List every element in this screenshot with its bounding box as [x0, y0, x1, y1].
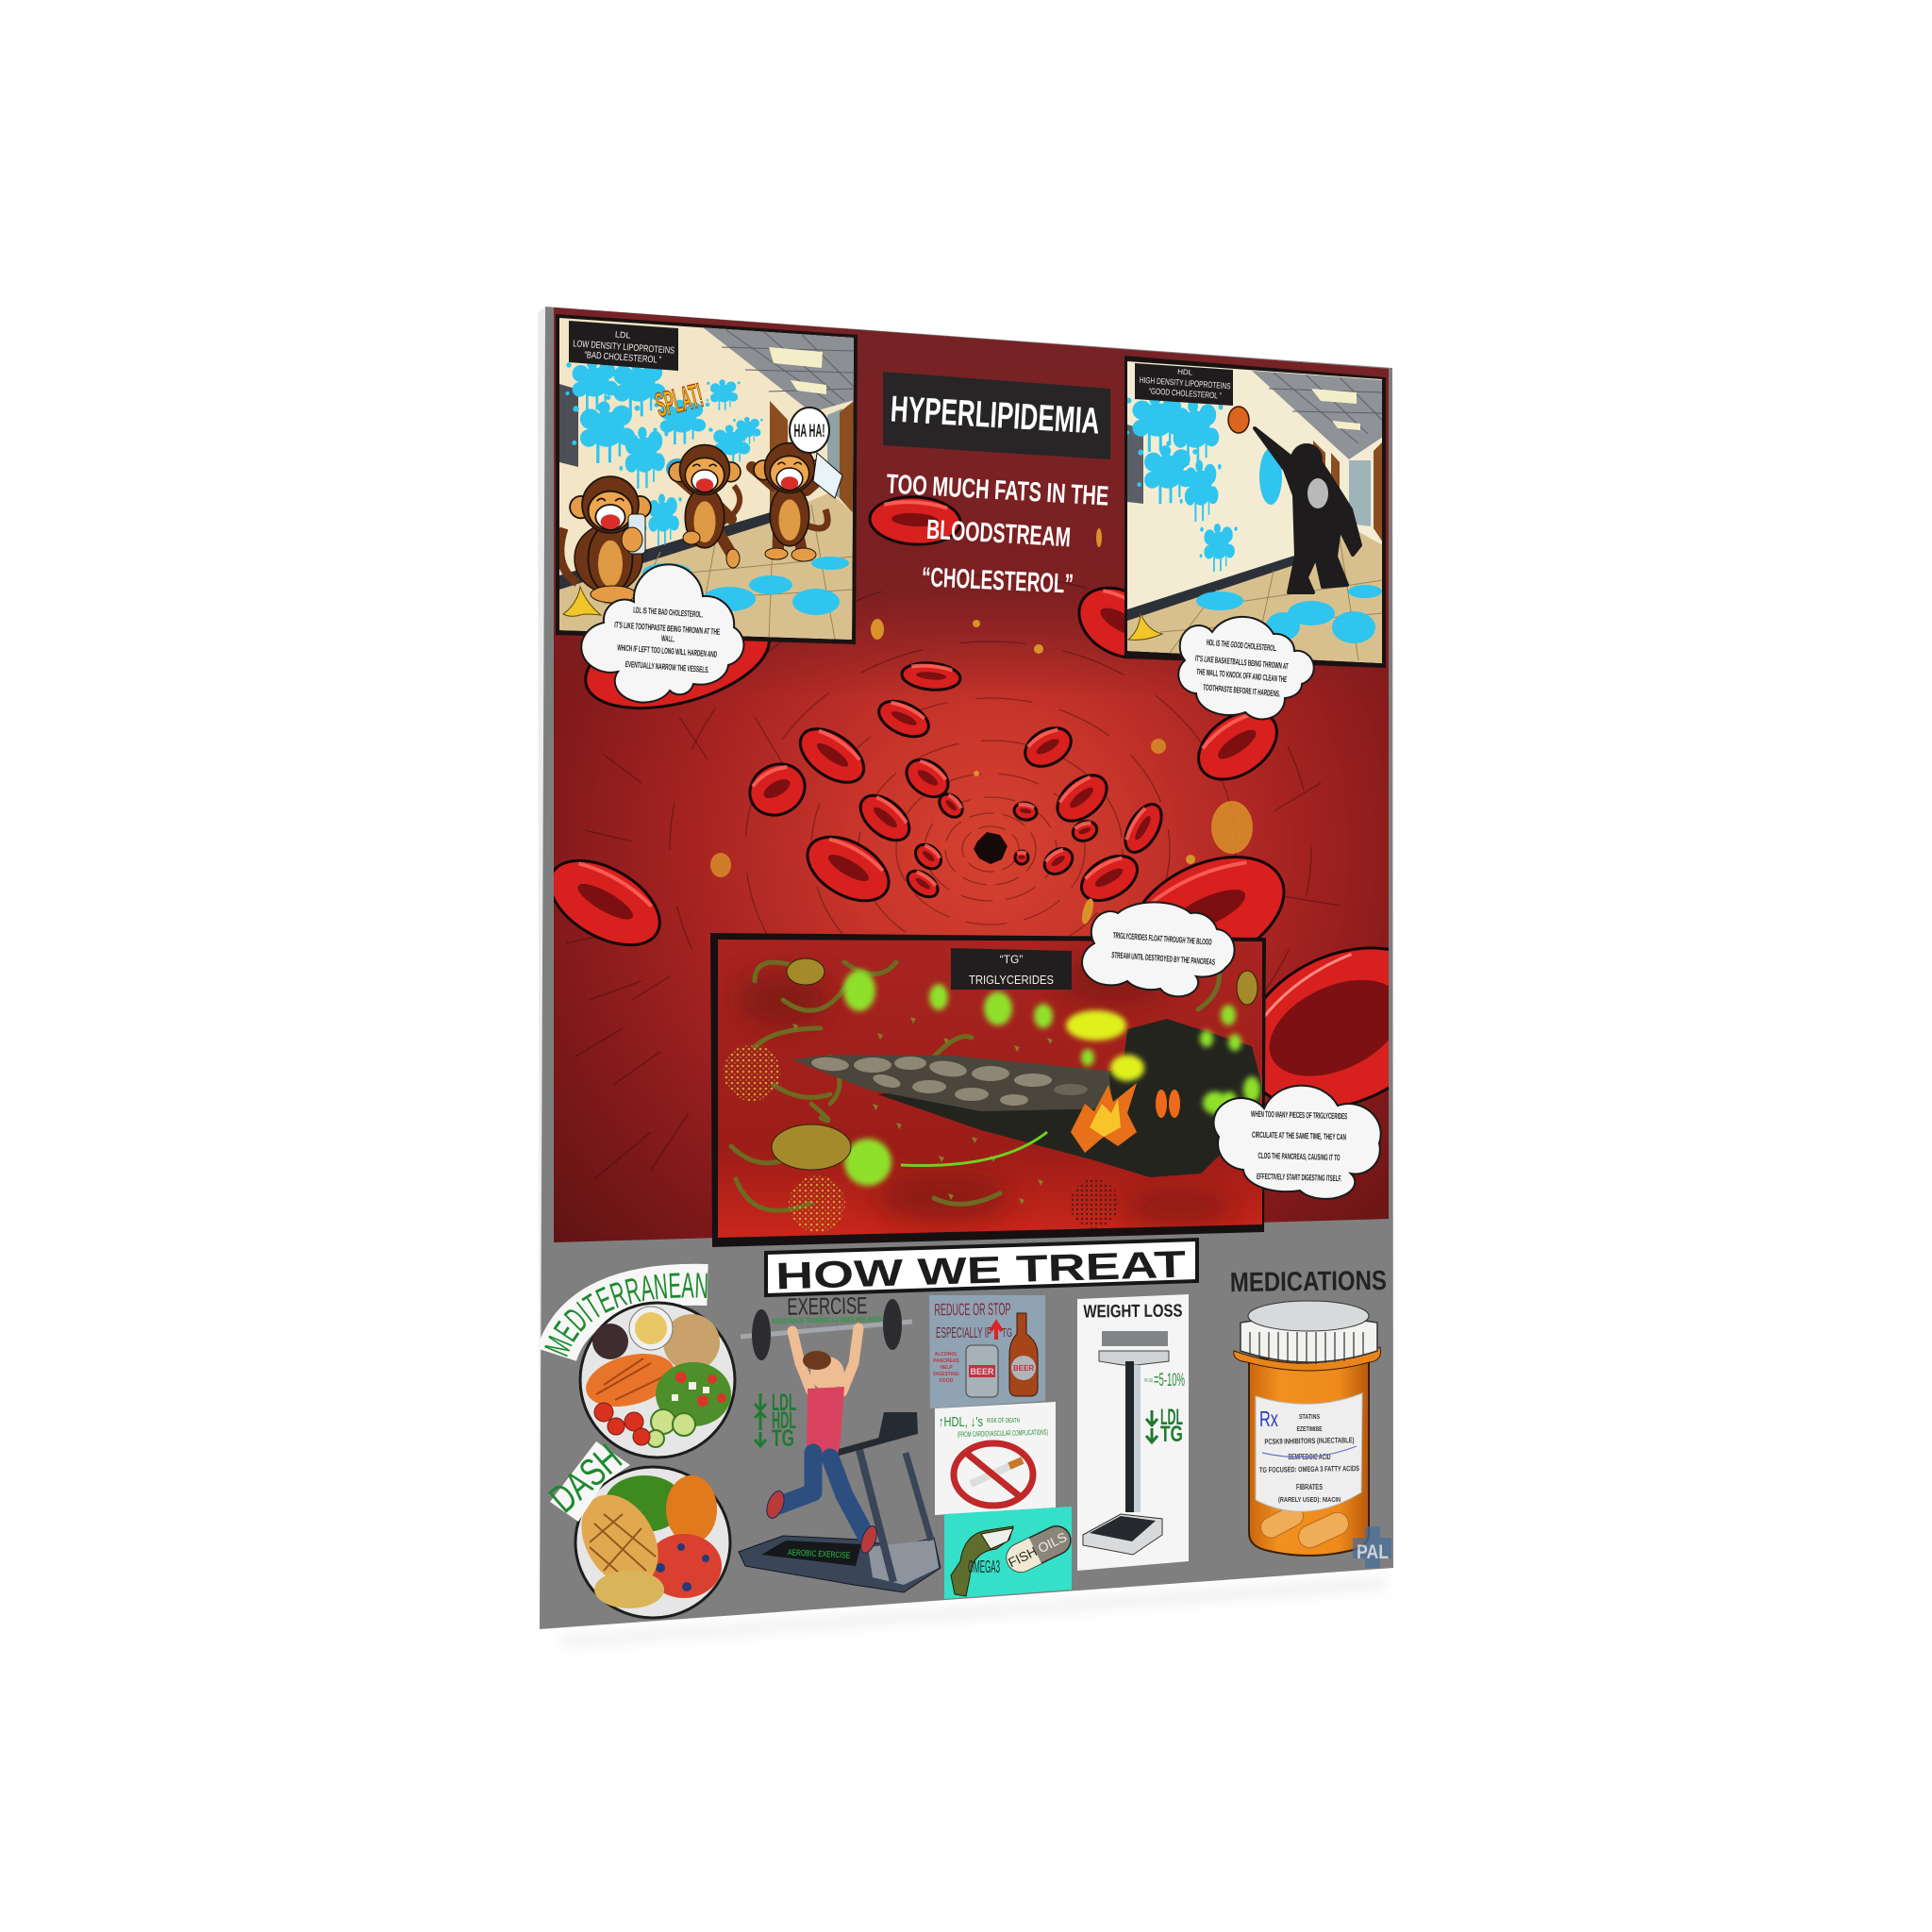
logo: PAL: PAL — [1357, 1541, 1389, 1563]
prescription label: FIBRATES — [1296, 1483, 1323, 1491]
icon: fish — [951, 1526, 1013, 1596]
parasite tentacles — [731, 962, 1219, 1210]
LDL label — [569, 321, 678, 371]
TG label — [951, 948, 1072, 990]
green energy orbs — [843, 970, 1260, 1186]
LDL hallway and doors — [559, 384, 854, 514]
callout: pancreas warning: WHEN TOO MANY PIECES OF TRIGLYCERIDES — [1251, 1109, 1347, 1121]
callout: LDL explanation: WALL. — [661, 634, 675, 643]
HDL floor — [1127, 526, 1383, 664]
fat globules — [710, 528, 1253, 925]
panel: alcohol: ESPECIALLY IF — [936, 1325, 991, 1341]
panel: weight loss: WEIGHT LOSS — [1083, 1302, 1183, 1322]
prescription label — [1256, 1393, 1362, 1511]
panel: alcohol — [929, 1295, 1045, 1408]
prescription label: (RARELY USED): NIACIN — [1278, 1497, 1341, 1504]
panel: stop smoking — [935, 1402, 1056, 1515]
HDL label: “GOOD CHOLESTEROL ” — [1148, 386, 1222, 401]
giant red blood cell — [1264, 946, 1389, 1105]
subtitle: TOO MUCH FATS IN THE — [886, 469, 1109, 512]
subtitle: “CHOLESTEROL” — [921, 562, 1074, 600]
callout: LDL explanation: EVENTUALLY NARROW THE VESSELS. — [625, 659, 709, 675]
panel: omega 3 — [944, 1507, 1075, 1599]
panel: weight loss: WT LOSS — [1144, 1378, 1153, 1384]
callout: HDL explanation — [1178, 617, 1314, 719]
callout: triglycerides float: TRIGLYCERIDES FLOAT THROUGH THE BLOOD — [1112, 930, 1212, 947]
icon: fish oil capsule: OILS — [1036, 1529, 1069, 1556]
icon: fish oil capsule: FISH — [1006, 1543, 1040, 1571]
bottle flange — [1234, 1347, 1381, 1371]
dark hole at vessel center — [974, 832, 1008, 864]
callout: LDL explanation: LDL IS THE BAD CHOLESTEROL. — [633, 605, 703, 620]
panel: HDL gorilla comic — [1123, 356, 1387, 670]
exercise effects: TG — [772, 1425, 794, 1452]
right monkey — [752, 443, 842, 561]
DASH label: DASH — [541, 1436, 630, 1521]
pills — [1257, 1502, 1352, 1552]
callout: triglycerides float: STREAM UNTIL DESTROYED BY THE PANCREAS — [1111, 950, 1215, 967]
panel: alcohol: TG — [1002, 1325, 1012, 1340]
LDL label: LOW DENSITY LIPOPROTEINS — [573, 339, 675, 357]
treadmill — [739, 1412, 941, 1592]
treadmill: AEROBIC EXERCISE — [788, 1547, 850, 1560]
panel: weight loss: =5-10% — [1154, 1371, 1185, 1391]
Mediterranean label text: MEDITERRANEAN — [544, 1273, 708, 1357]
panel: alcohol: FOOD — [940, 1378, 954, 1384]
HDL wall — [1123, 358, 1387, 670]
LDL label: LDL — [615, 329, 631, 341]
panel: triglycerides comic — [710, 933, 1269, 1247]
panel: alcohol: REDUCE OR STOP — [934, 1300, 1011, 1319]
logo: PAL — [1353, 1526, 1391, 1568]
panel: weight loss: LDL — [1160, 1405, 1183, 1430]
woman exercising — [763, 1328, 880, 1555]
callout: LDL explanation: WHICH IF LEFT TOO LONG WILL HARDEN AND — [617, 642, 718, 659]
red blood cells — [536, 495, 1302, 991]
flames — [1071, 1083, 1180, 1153]
panel: stop smoking: RISK OF DEATH — [987, 1418, 1020, 1424]
HDL hallway and doors — [1127, 425, 1383, 542]
TG label: “TG” — [1000, 953, 1023, 966]
TG label: TRIGLYCERIDES — [969, 973, 1054, 987]
debris — [792, 1017, 1053, 1205]
prescription label: STATINS — [1299, 1414, 1320, 1421]
heading: how we treat: HOW WE TREAT — [775, 1244, 1187, 1297]
speckle clusters — [724, 1044, 1119, 1232]
HDL label: HDL — [1177, 367, 1193, 377]
prescription label: EZETIMIBE — [1296, 1426, 1323, 1433]
DASH label — [541, 1436, 630, 1522]
panel: weight loss: TG — [1160, 1422, 1183, 1447]
exercise effects — [755, 1390, 796, 1452]
title block: HYPERLIPIDEMIA — [890, 389, 1101, 442]
icon: beer bottle: BEER — [1013, 1364, 1034, 1373]
panel: weight loss — [1077, 1294, 1189, 1571]
HDL label — [1135, 363, 1233, 406]
LDL floor — [559, 492, 855, 641]
panel: LDL monkeys comic: SPLAT! — [652, 375, 707, 425]
heading: how we treat — [766, 1240, 1197, 1297]
callout: pancreas warning — [1214, 1086, 1381, 1199]
ribbed cap — [1241, 1317, 1377, 1362]
subtitle: BLOODSTREAM — [925, 515, 1072, 553]
icon: fish oil capsule — [1002, 1522, 1075, 1576]
icon: beer can: BEER — [970, 1367, 994, 1376]
icon: no smoking — [954, 1443, 1033, 1506]
callout: HDL explanation: IT'S LIKE BASKETBALLS BEING THROWN AT — [1195, 654, 1289, 671]
TG background — [712, 934, 1269, 1245]
HDL ceiling — [1252, 371, 1383, 459]
subtitle — [886, 469, 1109, 600]
callout: pancreas warning: CIRCULATE AT THE SAME TIME, THEY CAN — [1252, 1130, 1346, 1141]
panel: LDL monkeys comic — [556, 314, 858, 644]
poster side edge — [538, 307, 545, 1629]
basketball — [1228, 407, 1249, 433]
HDL label: HIGH DENSITY LIPOPROTEINS — [1139, 375, 1231, 391]
panel: omega 3: OMEGA3 — [968, 1557, 1000, 1576]
prescription label: PCSK9 INHIBITORS (INJECTABLE) — [1264, 1436, 1355, 1446]
panel: stop smoking: ↑HDL, ↓'s — [939, 1414, 983, 1430]
speech bubble: HA HA: HA HA! — [794, 422, 824, 441]
HDL banana peel — [1128, 613, 1162, 640]
callout: HDL explanation: TOOTHPASTE BEFORE IT HARDENS. — [1203, 682, 1281, 699]
parasite creatures — [772, 958, 1257, 1170]
toothpaste splats — [565, 358, 849, 615]
exercise effects: HDL — [772, 1407, 796, 1434]
callout: LDL explanation: IT'S LIKE TOOTHPASTE BEING THROWN AT THE — [614, 620, 720, 637]
Mediterranean banner — [557, 1285, 708, 1355]
gorilla — [1255, 428, 1360, 592]
warship hull — [791, 1019, 1263, 1177]
HDL toothpaste splats — [1124, 393, 1382, 643]
LDL label: “BAD CHOLESTEROL ” — [584, 350, 661, 366]
callout: pancreas warning: CLOG THE PANCREAS, CAUSING IT TO — [1257, 1151, 1341, 1162]
callout: pancreas warning: EFFECTIVELY START DIGESTING ITSELF. — [1257, 1172, 1341, 1183]
prescription label: Rx — [1259, 1407, 1278, 1431]
exercise heading: EXERCISE — [787, 1292, 868, 1321]
panel: blood vessel background — [554, 308, 1389, 1242]
callout: HDL explanation: HDL IS THE GOOD CHOLESTEROL. — [1206, 638, 1277, 653]
icon: doctor scale — [1083, 1331, 1169, 1555]
prescription label: BEMPEDOIC ACID — [1289, 1453, 1331, 1461]
green beam — [901, 1132, 1047, 1166]
banana peel — [563, 587, 601, 616]
heading: medications: MEDICATIONS — [1230, 1266, 1387, 1298]
LDL ceiling — [703, 327, 855, 412]
callout: HDL explanation: THE WALL TO KNOCK OFF AND CLEAN THE — [1196, 667, 1288, 684]
panel: stop smoking: (FROM CARDIOVASCULAR COMPLICATIONS) — [958, 1428, 1048, 1439]
icon: barbell — [741, 1299, 912, 1360]
panel: alcohol: ALCOHOL — [935, 1352, 958, 1357]
callout: LDL explanation — [581, 564, 743, 702]
Mediterranean diet plate — [580, 1303, 735, 1457]
poster gray base — [540, 307, 1393, 1629]
panel: alcohol: PANCREAS — [933, 1358, 960, 1364]
middle monkey — [669, 445, 741, 568]
title block — [883, 372, 1110, 459]
panel: alcohol: DIGESTING — [933, 1372, 959, 1377]
DASH diet plate — [566, 1467, 730, 1618]
exercise heading — [772, 1292, 883, 1325]
poster shadow — [557, 1577, 1387, 1646]
icon: pill bottle — [1234, 1301, 1381, 1556]
left monkey — [560, 476, 651, 603]
LDL wall — [557, 316, 858, 641]
panel: alcohol: HELP — [940, 1365, 953, 1371]
callout: triglycerides float — [1082, 902, 1235, 996]
cap top — [1248, 1301, 1369, 1331]
speech bubble: HA HA — [790, 408, 829, 453]
exercise heading: RESISTANCE TRAINING 2-3 TIMES PER WEEK — [772, 1315, 883, 1325]
exercise effects: LDL — [772, 1390, 796, 1416]
prescription label: TG FOCUSED: OMEGA 3 FATTY ACIDS — [1259, 1464, 1360, 1474]
